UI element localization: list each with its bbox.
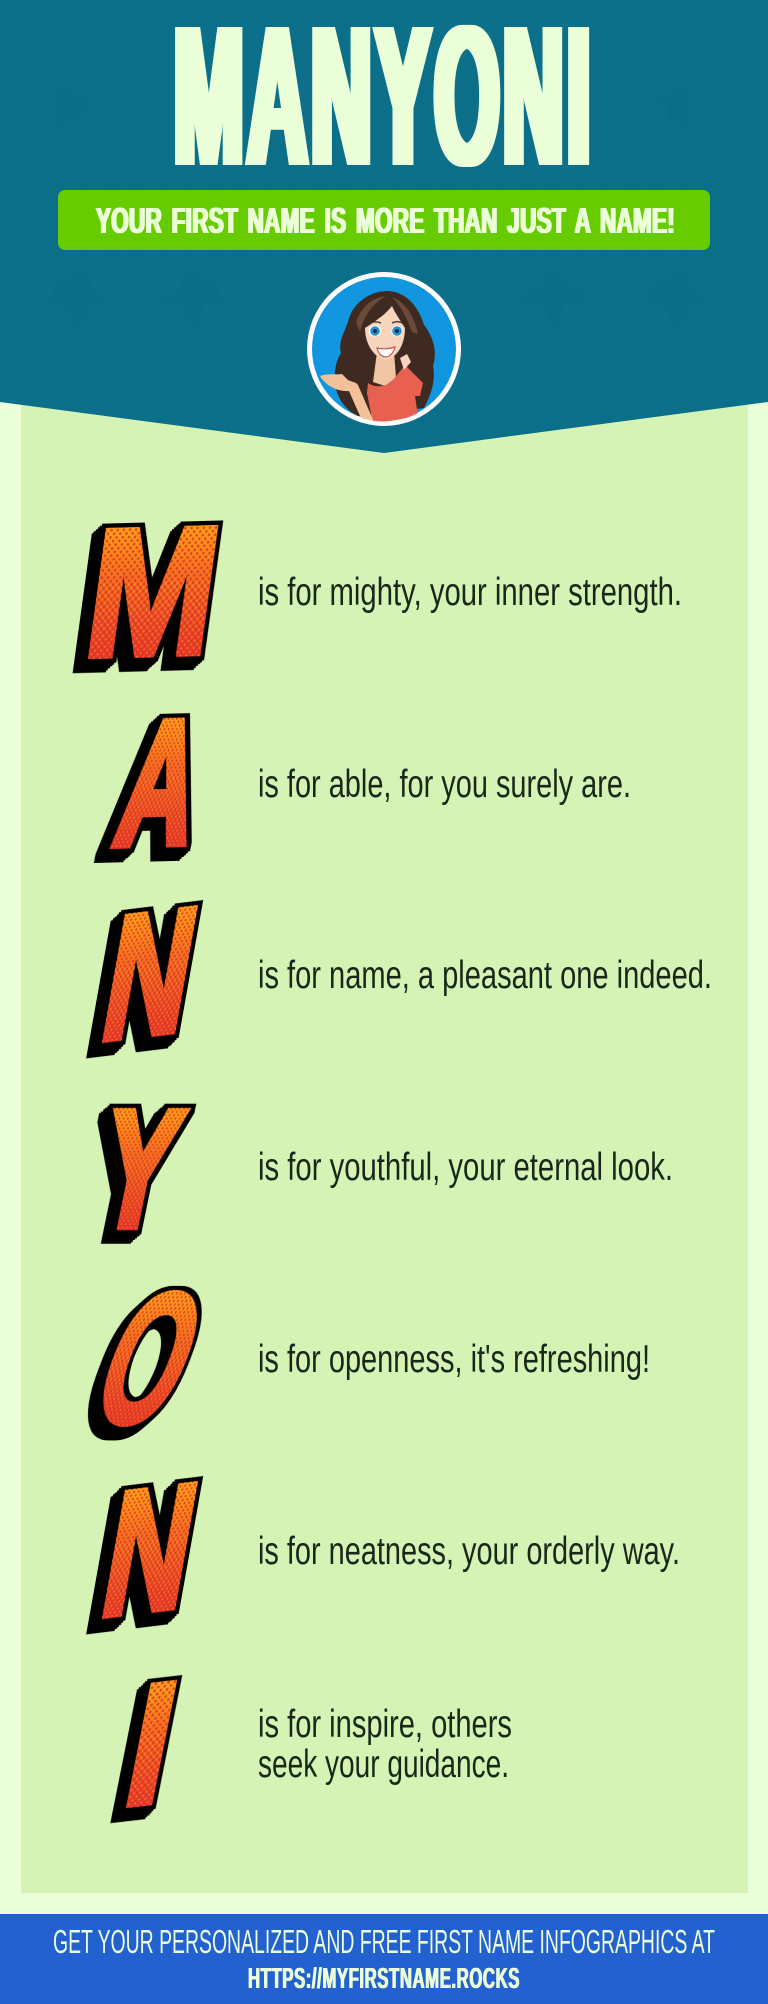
text: two lines for I: is for inspire, others: [258, 1703, 512, 1746]
text: two lines for I: [258, 1703, 512, 1786]
letter Y: Y: [84, 1078, 194, 1262]
letter N: N: [90, 871, 209, 1079]
banner: tagline: [58, 190, 710, 250]
letter M: M: [75, 487, 231, 695]
footer: [0, 1914, 768, 2004]
panel: light green content area: [21, 380, 748, 1893]
text: line for A: is for able, for you surely are.: [258, 763, 631, 806]
letter O: O: [70, 1252, 230, 1463]
text: two lines for I: seek your guidance.: [258, 1743, 509, 1786]
icon: avatar of smiling woman in circle: [307, 272, 461, 426]
letter I: I: [110, 1643, 193, 1846]
footer: HTTPS://MYFIRSTNAME.ROCKS: [248, 1963, 520, 1995]
panel: teal chevron header: [0, 0, 768, 453]
letter N second: N: [90, 1447, 209, 1655]
letter A: A: [104, 684, 218, 883]
